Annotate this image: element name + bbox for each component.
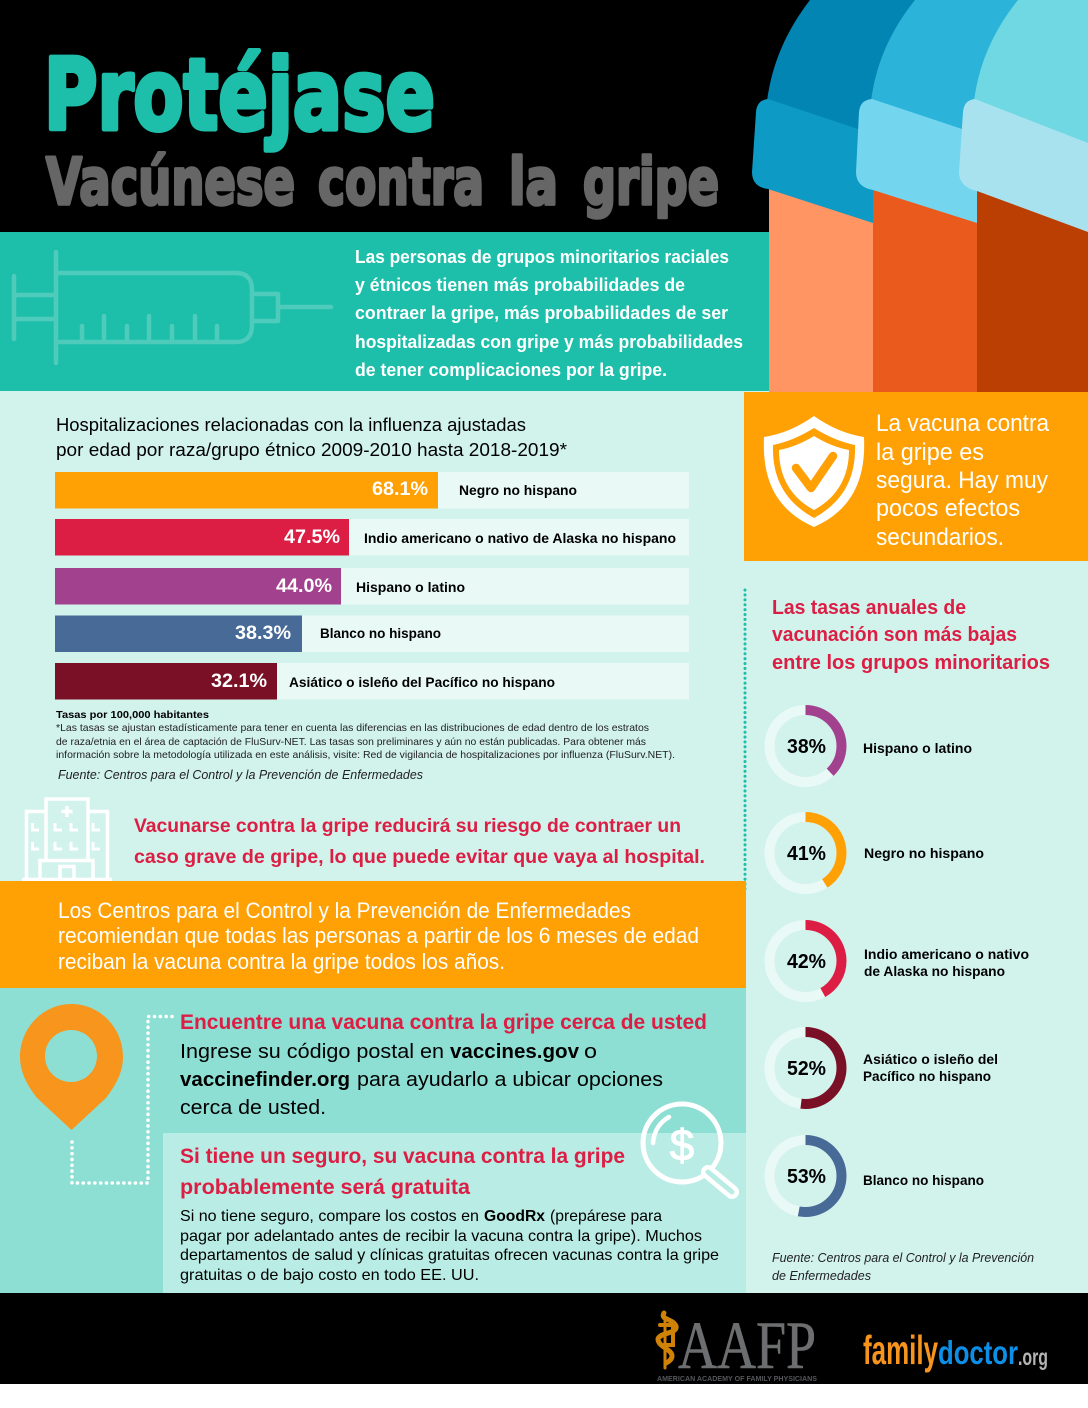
find vaccine text: o bbox=[584, 1041, 597, 1063]
panel: CDC recommendation bbox=[0, 881, 746, 988]
dotted connector bbox=[72, 1016, 172, 1183]
insurance text: GoodRx bbox=[484, 1208, 545, 1225]
donut: 41% Negro no hispano: Negro no hispano bbox=[864, 845, 984, 861]
panel: CDC recommendation: reciban la vacuna contra la gripe todos los años. bbox=[58, 949, 505, 974]
dotted divider bbox=[744, 590, 746, 893]
logo: familydoctor.org: doctor bbox=[938, 1334, 1018, 1371]
chart footnotes: Tasas por 100,000 habitantes bbox=[56, 709, 209, 721]
insurance heading bbox=[180, 1145, 625, 1199]
donut: 42% Indio americano: Indio americano o nativo bbox=[864, 946, 1029, 962]
donut: 53% Blanco: Blanco no hispano bbox=[863, 1172, 984, 1188]
safety text: segura. Hay muy bbox=[876, 467, 1048, 494]
safety text bbox=[876, 410, 1050, 551]
insurance text: gratuitas o de bajo costo en todo EE. UU. bbox=[180, 1267, 479, 1284]
chart title bbox=[56, 415, 567, 460]
insurance text: pagar por adelantado antes de recibir la vacuna contra la gripe). Muchos bbox=[180, 1228, 702, 1245]
insurance text bbox=[180, 1208, 719, 1284]
bar chart: 38.3% bbox=[235, 623, 291, 644]
find vaccine text: cerca de usted. bbox=[180, 1097, 326, 1119]
intro text: hospitalizadas con gripe y más probabilidades bbox=[355, 332, 743, 352]
donut: 42% Indio americano: de Alaska no hispano bbox=[864, 963, 1005, 979]
chart footnotes bbox=[56, 709, 675, 782]
icon: magnifier with dollar: $ bbox=[670, 1121, 694, 1170]
chart title: Hospitalizaciones relacionadas con la influenza ajustadas bbox=[56, 415, 526, 435]
bar chart: 32.1% bbox=[211, 671, 267, 692]
find vaccine text: Ingrese su código postal en bbox=[180, 1041, 444, 1063]
donut: 42% Indio americano: 42% bbox=[787, 951, 826, 973]
chart footnotes: información sobre la metodología utilizada en este análisis, visite: Red de vigilancia de hospitalizaciones por influenza (FluSurv.NET). bbox=[56, 749, 675, 761]
icon: syringe bbox=[14, 252, 331, 363]
logo: familydoctor.org: family bbox=[863, 1327, 938, 1373]
bar chart: Asiático o isleño del Pacífico no hispano bbox=[289, 674, 555, 690]
find vaccine text: vaccinefinder.org bbox=[180, 1069, 350, 1091]
illustration: three raised arms with sleeves bbox=[752, 0, 1088, 392]
find vaccine text: para ayudarlo a ubicar opciones bbox=[357, 1069, 663, 1091]
icon: hospital bbox=[22, 799, 112, 880]
logo: AAFP: AAFP bbox=[678, 1307, 816, 1383]
donut: 38% Hispano o latino: 38% bbox=[787, 736, 826, 758]
intro text bbox=[355, 247, 743, 380]
rates heading: entre los grupos minoritarios bbox=[772, 652, 1050, 674]
find vaccine text bbox=[180, 1011, 707, 1119]
icon: location pin bbox=[20, 1004, 123, 1130]
title: Protéjase bbox=[44, 39, 435, 153]
donut: 38% Hispano o latino bbox=[770, 710, 972, 782]
panel: insurance bbox=[163, 1104, 746, 1293]
rates heading: vacunación son más bajas bbox=[772, 624, 1017, 646]
intro text: Las personas de grupos minoritarios raciales bbox=[355, 247, 729, 267]
bar chart: 68.1% bbox=[372, 479, 428, 500]
safety text: La vacuna contra bbox=[876, 410, 1050, 437]
panel: CDC recommendation: Los Centros para el Control y la Prevención de Enfermedades bbox=[58, 898, 631, 923]
chart title: por edad por raza/grupo étnico 2009-2010 hasta 2018-2019* bbox=[56, 440, 567, 460]
chart footnotes: *Las tasas se ajustan estadísticamente para tener en cuenta las diferencias en las distribuciones de edad dentro de los estratos bbox=[56, 722, 649, 734]
insurance text: Si no tiene seguro, compare los costos en bbox=[180, 1208, 479, 1225]
panel: vaccination rates bbox=[770, 597, 1050, 1283]
subtitle bbox=[46, 146, 719, 220]
donut: 53% Blanco: 53% bbox=[787, 1166, 826, 1188]
bar chart bbox=[55, 472, 689, 700]
footer band bbox=[0, 1293, 1088, 1384]
rates source: de Enfermedades bbox=[772, 1269, 871, 1283]
bar chart: Indio americano o nativo de Alaska no hispano bbox=[364, 530, 676, 546]
rates source bbox=[772, 1251, 1034, 1283]
donut: 42% Indio americano bbox=[770, 925, 1029, 997]
subtitle: gripe bbox=[583, 146, 719, 220]
panel: CDC recommendation: recomiendan que todas las personas a partir de los 6 meses de edad bbox=[58, 923, 699, 948]
donut: 52% Asiático: 52% bbox=[787, 1058, 826, 1080]
bar chart: 44.0% bbox=[276, 576, 332, 597]
insurance text: (prepárese para bbox=[550, 1208, 662, 1225]
insurance heading: probablemente será gratuita bbox=[180, 1176, 470, 1199]
bar chart: Negro no hispano bbox=[459, 482, 577, 498]
panel: find a vaccine bbox=[0, 988, 746, 1293]
donut: 52% Asiático: Pacífico no hispano bbox=[863, 1068, 991, 1084]
logo: familydoctor.org bbox=[863, 1327, 1048, 1373]
logo: familydoctor.org: .org bbox=[1018, 1344, 1048, 1370]
bar chart: 47.5% bbox=[284, 527, 340, 548]
safety text: secundarios. bbox=[876, 524, 1004, 551]
panel: vaccine is safe bbox=[744, 392, 1088, 561]
subtitle: Vacúnese bbox=[46, 146, 295, 220]
bar chart: Blanco no hispano bbox=[320, 625, 441, 641]
logo: AAFP: AMERICAN ACADEMY OF FAMILY PHYSICIANS bbox=[657, 1374, 817, 1383]
callout: reduce risk: Vacunarse contra la gripe reducirá su riesgo de contraer un bbox=[134, 816, 681, 837]
donut: 41% Negro no hispano bbox=[770, 817, 984, 889]
insurance heading: Si tiene un seguro, su vacuna contra la gripe bbox=[180, 1145, 625, 1168]
callout: reduce risk: caso grave de gripe, lo que puede evitar que vaya al hospital. bbox=[134, 847, 705, 868]
safety text: la gripe es bbox=[876, 439, 984, 466]
rates heading bbox=[772, 597, 1050, 674]
donut: 38% Hispano o latino: Hispano o latino bbox=[863, 740, 972, 756]
subtitle: la bbox=[509, 146, 558, 220]
intro text: y étnicos tienen más probabilidades de bbox=[355, 275, 685, 295]
donut: 52% Asiático: Asiático o isleño del bbox=[863, 1051, 998, 1067]
donut: 52% Asiático bbox=[770, 1032, 998, 1104]
rates source: Fuente: Centros para el Control y la Prevención bbox=[772, 1251, 1034, 1265]
icon: shield with check bbox=[764, 416, 864, 527]
donut: 53% Blanco bbox=[770, 1140, 984, 1212]
insurance text: departamentos de salud y clínicas gratuitas ofrecen vacunas contra la gripe bbox=[180, 1247, 719, 1264]
intro text: de tener complicaciones por la gripe. bbox=[355, 360, 667, 380]
safety text: pocos efectos bbox=[876, 495, 1020, 522]
icon: magnifier with dollar bbox=[643, 1104, 732, 1192]
chart footnotes: de raza/etnia en el área de captación de FluSurv-NET. Las tasas son preliminares y aún no están publicadas. Para obtener más bbox=[56, 736, 646, 748]
callout: reduce risk bbox=[134, 816, 705, 868]
find vaccine text: vaccines.gov bbox=[450, 1041, 580, 1063]
rates heading: Las tasas anuales de bbox=[772, 597, 966, 619]
subtitle: contra bbox=[318, 146, 484, 220]
header band bbox=[0, 0, 1088, 232]
chart footnotes: Fuente: Centros para el Control y la Prevención de Enfermedades bbox=[58, 768, 423, 782]
panel: intro band bbox=[0, 232, 769, 391]
panel: hospitalization chart bbox=[55, 415, 689, 782]
intro text: contraer la gripe, más probabilidades de ser bbox=[355, 303, 728, 323]
donut: 41% Negro no hispano: 41% bbox=[787, 843, 826, 865]
bar chart: Hispano o latino bbox=[356, 579, 465, 595]
find vaccine text: Encuentre una vacuna contra la gripe cerca de usted bbox=[180, 1011, 707, 1034]
